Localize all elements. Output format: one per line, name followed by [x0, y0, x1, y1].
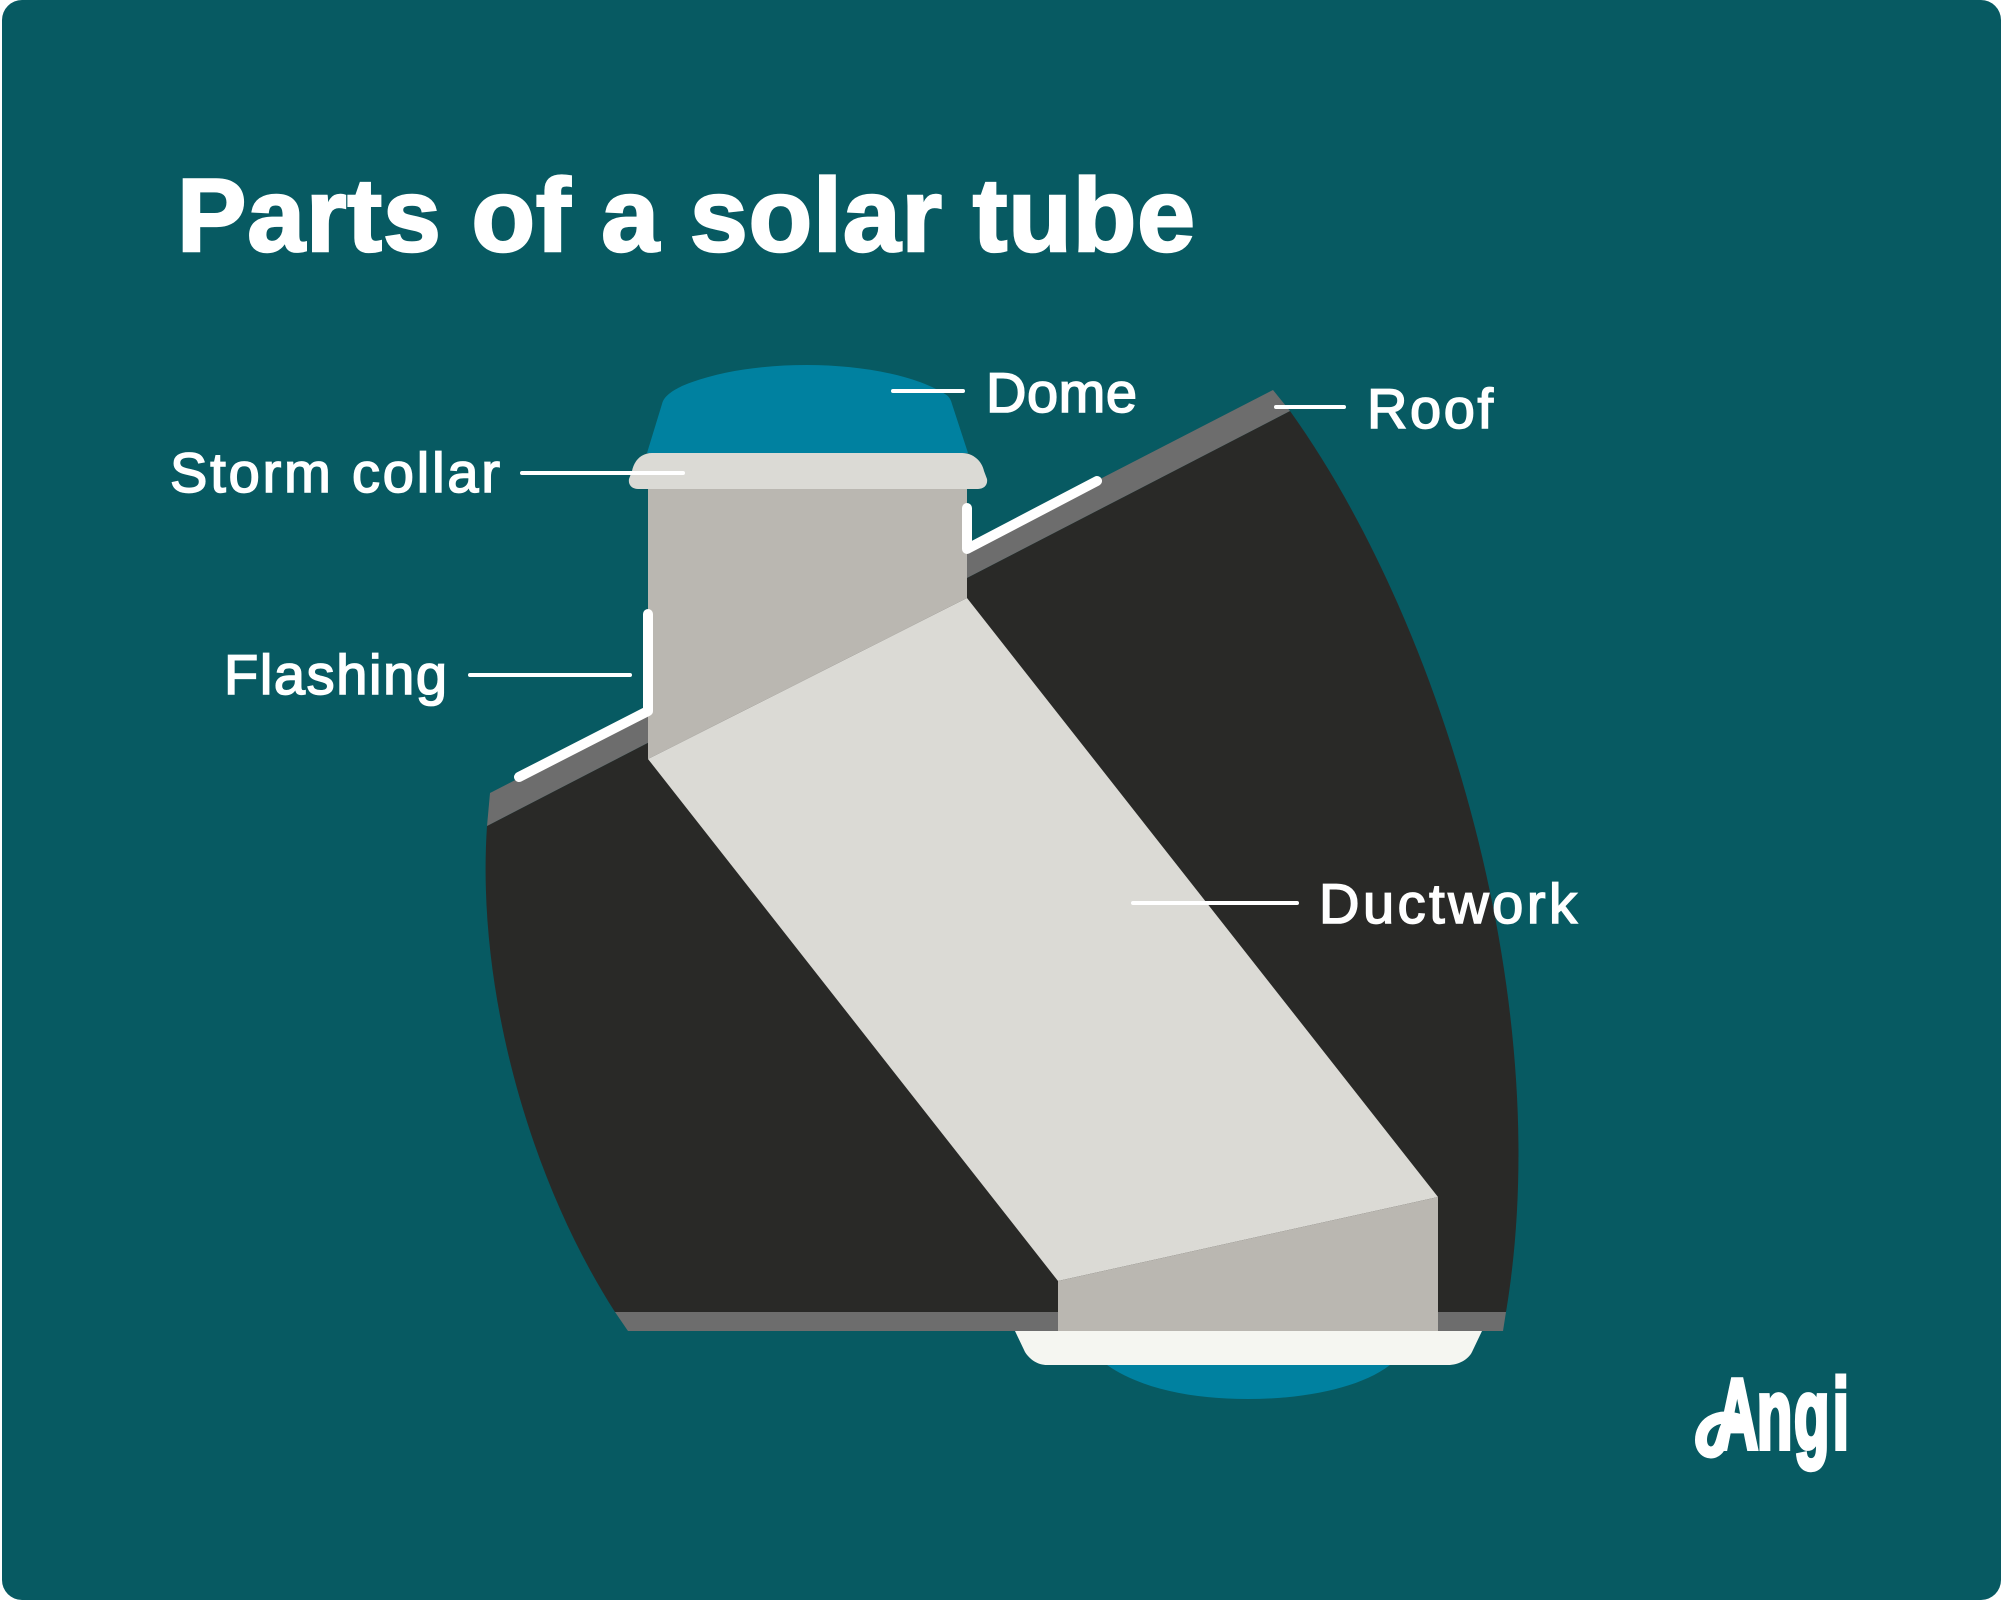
roof bottom band [615, 1312, 1506, 1331]
label: ductwork: Ductwork [1319, 872, 1578, 935]
right flashing [967, 481, 1097, 549]
leader: storm collar [522, 471, 683, 475]
lower tube [1058, 1197, 1438, 1331]
lower dome [1107, 1365, 1390, 1399]
leader: roof [1276, 405, 1344, 409]
label: roof: Roof [1367, 377, 1493, 440]
upper dome [647, 365, 968, 453]
title: Parts of a solar tube [177, 158, 1195, 274]
roof top band [487, 390, 1290, 826]
ductwork diagonal [648, 598, 1438, 1281]
leader: dome [893, 389, 963, 393]
diffuser trim [1015, 1331, 1482, 1365]
label: flashing: Flashing [224, 643, 447, 706]
upper tube [648, 480, 967, 759]
leader: ductwork [1133, 901, 1297, 905]
leader: flashing [470, 673, 630, 677]
storm collar [629, 453, 987, 489]
logo swash [1701, 1418, 1740, 1452]
logo wordmark: Angi [1716, 1358, 1849, 1470]
left flashing [519, 614, 648, 777]
logo: Angi [1701, 1358, 1849, 1470]
solar tube diagram [486, 365, 1518, 1399]
label: storm collar: Storm collar [170, 441, 500, 504]
label: dome: Dome [986, 361, 1137, 424]
roof section dark [486, 411, 1518, 1312]
